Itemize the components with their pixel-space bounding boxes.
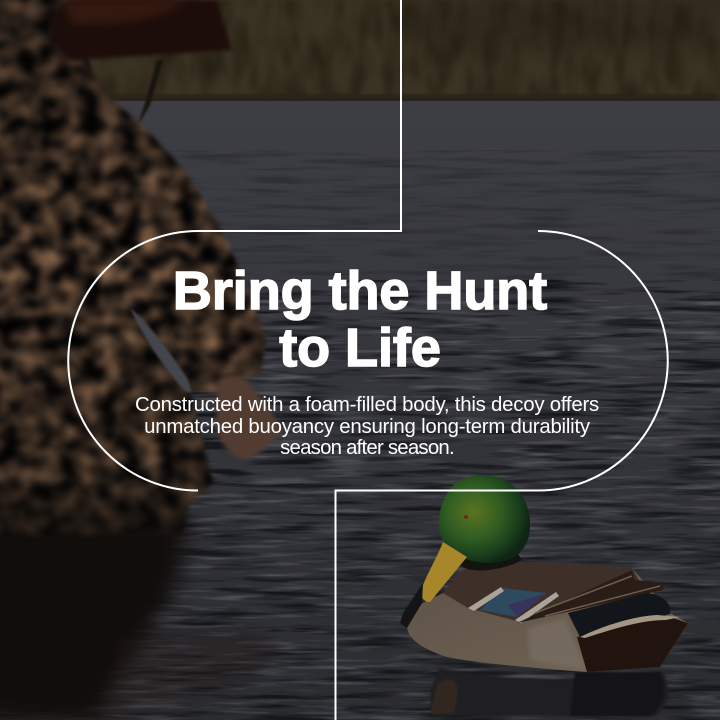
water gap between arm and torso xyxy=(130,308,192,392)
duck body xyxy=(407,562,688,672)
wing xyxy=(443,562,640,622)
title: Bring the Hunt xyxy=(173,261,547,321)
left line segment xyxy=(68,0,401,490)
hunter camouflage xyxy=(0,0,290,540)
description text xyxy=(135,394,599,459)
right line segment xyxy=(336,231,668,720)
neck xyxy=(460,554,522,570)
description text: unmatched buoyancy ensuring long-term durability xyxy=(144,416,590,438)
description text: Constructed with a foam-filled body, this decoy offers xyxy=(135,394,599,416)
head xyxy=(439,475,530,563)
flank highlight xyxy=(529,620,580,664)
speculum xyxy=(480,588,547,617)
title: to Life xyxy=(279,318,441,378)
chin xyxy=(400,583,423,628)
description text: season after season. xyxy=(280,437,454,459)
gunstock xyxy=(50,0,232,60)
hand xyxy=(217,375,283,460)
wing feathers xyxy=(517,570,663,623)
dark reflection lower left xyxy=(0,515,186,720)
duck reflection xyxy=(430,668,668,716)
title xyxy=(173,261,548,378)
far bank xyxy=(64,0,720,101)
duck decoy xyxy=(400,475,688,716)
tail xyxy=(568,593,670,637)
bill xyxy=(420,542,467,602)
white wing bars xyxy=(468,587,504,611)
